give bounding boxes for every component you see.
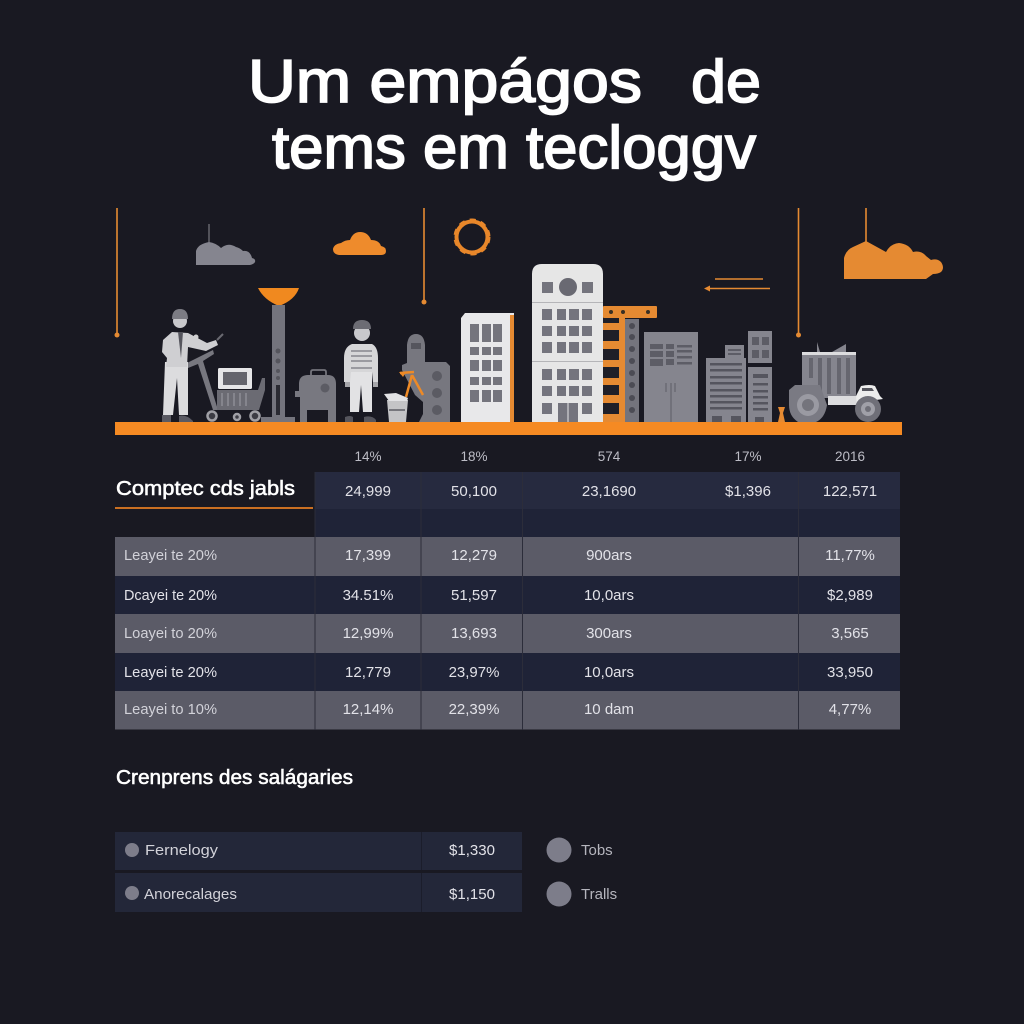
row 4: 33,950: [827, 664, 873, 681]
row 2: 34.51%: [343, 587, 393, 604]
title: [248, 48, 761, 181]
cart with monitor: [187, 350, 265, 420]
title: Um empágos: [248, 48, 642, 115]
building 1: [461, 313, 514, 422]
column headers: 17%: [734, 449, 762, 464]
icon: double arrow: [704, 279, 770, 292]
table heading: Comptec cds jabls: [116, 478, 295, 500]
column headers: 2016: [835, 449, 865, 464]
row 1: Leayei te 20%: [124, 547, 217, 564]
salary row 1: Fernelogy: [145, 842, 219, 859]
row 1: 11,77%: [825, 547, 875, 564]
row 4: 12,779: [345, 664, 391, 681]
salary row 2: [115, 873, 522, 912]
salary row 2: Anorecalages: [144, 886, 237, 903]
row 4: 23,97%: [449, 664, 499, 681]
building cluster: [706, 331, 772, 422]
row: top values: 23,1690: [582, 483, 636, 500]
row 3: 3,565: [831, 625, 869, 642]
row 5: 12,14%: [343, 701, 393, 718]
title: tems em tecloggv: [272, 114, 756, 181]
tractor: [789, 342, 883, 422]
worker standing: [344, 320, 378, 422]
icon: orange cloud: [333, 232, 386, 255]
hooded machine: [399, 334, 450, 422]
row 2: 10,0ars: [584, 587, 634, 604]
building 3: [644, 332, 698, 422]
row 1: 900ars: [586, 547, 632, 564]
legend: [546, 838, 617, 906]
row 5: 10 dam: [584, 701, 634, 718]
small orange figure: [778, 407, 785, 422]
row 5: Leayei to 10%: [124, 701, 217, 718]
row 3: Loayei to 20%: [124, 625, 217, 642]
data table: [115, 449, 900, 730]
row: top values: 24,999: [345, 483, 391, 500]
icon: large orange cloud: [844, 208, 943, 279]
row: top values: [345, 483, 877, 500]
row 4: [124, 664, 873, 681]
salary table: [115, 832, 522, 912]
salary heading: Crenprens des salágaries: [116, 767, 353, 789]
row 1: 12,279: [451, 547, 497, 564]
salary row 2: $1,150: [449, 886, 495, 903]
salary row 1: [115, 832, 522, 870]
illustration: industry skyline: [114, 208, 943, 435]
row 4: 10,0ars: [584, 664, 634, 681]
orange ground bar: [115, 422, 902, 435]
row: top values: 50,100: [451, 483, 497, 500]
legend item: Tobs: Tobs: [581, 842, 613, 859]
worker with tablet: [162, 309, 223, 422]
row: top values: $1,396: [725, 483, 771, 500]
row 2: $2,989: [827, 587, 873, 604]
lamp post: [258, 288, 299, 422]
row 2: 51,597: [451, 587, 497, 604]
row 3: 12,99%: [343, 625, 393, 642]
row 5: 22,39%: [449, 701, 499, 718]
salary row 1: $1,330: [449, 842, 495, 859]
orange hanging lines: [114, 208, 801, 338]
row: top values: 122,571: [823, 483, 877, 500]
row 1: [124, 547, 875, 564]
row 4: Leayei te 20%: [124, 664, 217, 681]
legend item: Tralls: Tralls: [581, 886, 617, 903]
row 5: [124, 701, 871, 718]
row 3: 300ars: [586, 625, 632, 642]
title: de: [691, 48, 761, 115]
row 5: 4,77%: [829, 701, 871, 718]
building 2: [532, 264, 603, 422]
column headers: 574: [598, 449, 621, 464]
icon: gray cloud: [196, 224, 255, 265]
row 2: [124, 587, 873, 604]
column headers: 14%: [354, 449, 382, 464]
generator machine: [295, 370, 336, 422]
bucket with papers: [384, 393, 408, 422]
row 3: [124, 625, 869, 642]
row 1: 17,399: [345, 547, 391, 564]
icon: gear: [455, 220, 489, 254]
crane tower: [603, 306, 657, 422]
column headers: 18%: [460, 449, 488, 464]
row 3: 13,693: [451, 625, 497, 642]
column headers: [354, 449, 865, 464]
row 2: Dcayei te 20%: [124, 587, 217, 604]
table background rows: [115, 472, 900, 730]
